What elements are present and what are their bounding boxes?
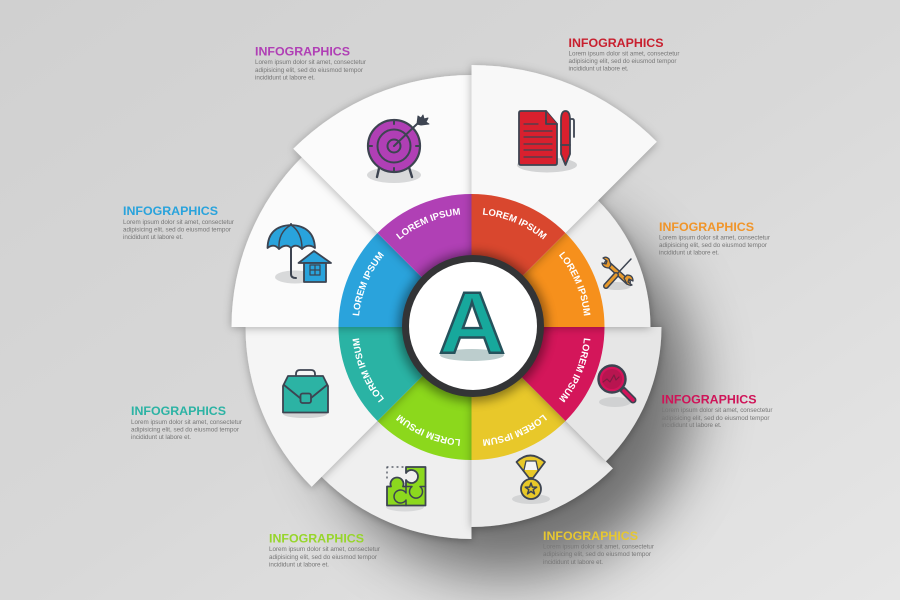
callout: orange: incididunt ut labore et. [659,250,719,256]
callout: purple: incididunt ut labore et. [255,74,315,82]
segment: yellow [466,378,613,531]
callout: green: incididunt ut labore et. [269,562,329,568]
icon: target with arrow [367,115,429,183]
callout: orange: adipisicing elit, sed do eiusmod tempor [659,242,767,249]
segment: orange [523,200,654,333]
callout: blue: Lorem ipsum dolor sit amet, consectetur [123,219,234,226]
callout: purple: adipisicing elit, sed do eiusmod tempor [255,67,363,74]
callout: red [568,36,680,72]
callout: purple: INFOGRAPHICS [255,44,350,58]
callout: blue: adipisicing elit, sed do eiusmod tempor [123,226,231,234]
callout: teal: INFOGRAPHICS [131,404,226,418]
segment: red [466,62,659,279]
callout: teal: incididunt ut labore et. [131,434,191,441]
callout: teal: adipisicing elit, sed do eiusmod tempor [131,426,239,434]
callout: crimson [662,392,772,429]
icon: briefcase [283,370,328,418]
icon: medal [512,456,550,504]
callout: yellow: adipisicing elit, sed do eiusmod tempor [543,551,651,558]
callout: crimson: adipisicing elit, sed do eiusmod tempor [662,415,770,422]
callout: orange: INFOGRAPHICS [659,220,754,234]
callout: green: adipisicing elit, sed do eiusmod tempor [269,554,377,561]
callout: green [269,532,380,568]
callout: yellow: Lorem ipsum dolor sit amet, consectetur [543,544,654,550]
label: yellow band: LOREM IPSUM [482,414,547,446]
callout: red: INFOGRAPHICS [568,36,664,50]
callout: red: Lorem ipsum dolor sit amet, consectetur [568,50,680,58]
callout: blue: INFOGRAPHICS [123,204,218,218]
callout: teal [131,404,242,441]
label: blue band: LOREM IPSUM [352,252,384,316]
callout: yellow: INFOGRAPHICS [543,529,638,543]
segment: green [320,376,474,543]
callout: yellow: incididunt ut labore et. [543,559,603,566]
icon: puzzle [386,467,426,512]
segment: crimson [518,324,665,464]
callout: green: INFOGRAPHICS [269,532,364,546]
callout: orange: Lorem ipsum dolor sit amet, consectetur [659,234,770,242]
callout: yellow [543,529,654,566]
icon: magnifier [598,366,633,407]
callout: blue: incididunt ut labore et. [123,234,183,241]
center letter: A [439,274,505,371]
callout: crimson: incididunt ut labore et. [662,422,722,429]
label: purple band: LOREM IPSUM [396,208,460,240]
callout: crimson: INFOGRAPHICS [662,392,756,406]
label: red band: LOREM IPSUM [482,208,547,240]
callout: green: Lorem ipsum dolor sit amet, consectetur [269,546,380,553]
callout: crimson: Lorem ipsum dolor sit amet, consectetur [662,407,772,414]
callout: teal: Lorem ipsum dolor sit amet, consectetur [131,419,242,426]
label: orange band: LOREM IPSUM [559,252,590,316]
callout: orange [659,220,770,256]
callout: purple: Lorem ipsum dolor sit amet, consectetur [255,59,366,66]
icon: document and pen [517,111,577,172]
callout: red: incididunt ut labore et. [568,66,629,72]
callout: purple [255,44,366,82]
icon: umbrella and house [268,224,331,284]
callout: red: adipisicing elit, sed do eiusmod tempor [568,58,676,65]
label: teal band: LOREM IPSUM [352,338,384,402]
icon: wrench and screwdriver [602,257,633,290]
label: green band: LOREM IPSUM [396,414,460,446]
segment: blue [227,156,422,334]
segment: teal [241,327,426,490]
callout: blue [123,204,234,241]
segment: purple [292,72,472,280]
center badge [398,252,548,402]
large drop shadow [317,200,693,576]
label: crimson band: LOREM IPSUM [559,338,590,402]
